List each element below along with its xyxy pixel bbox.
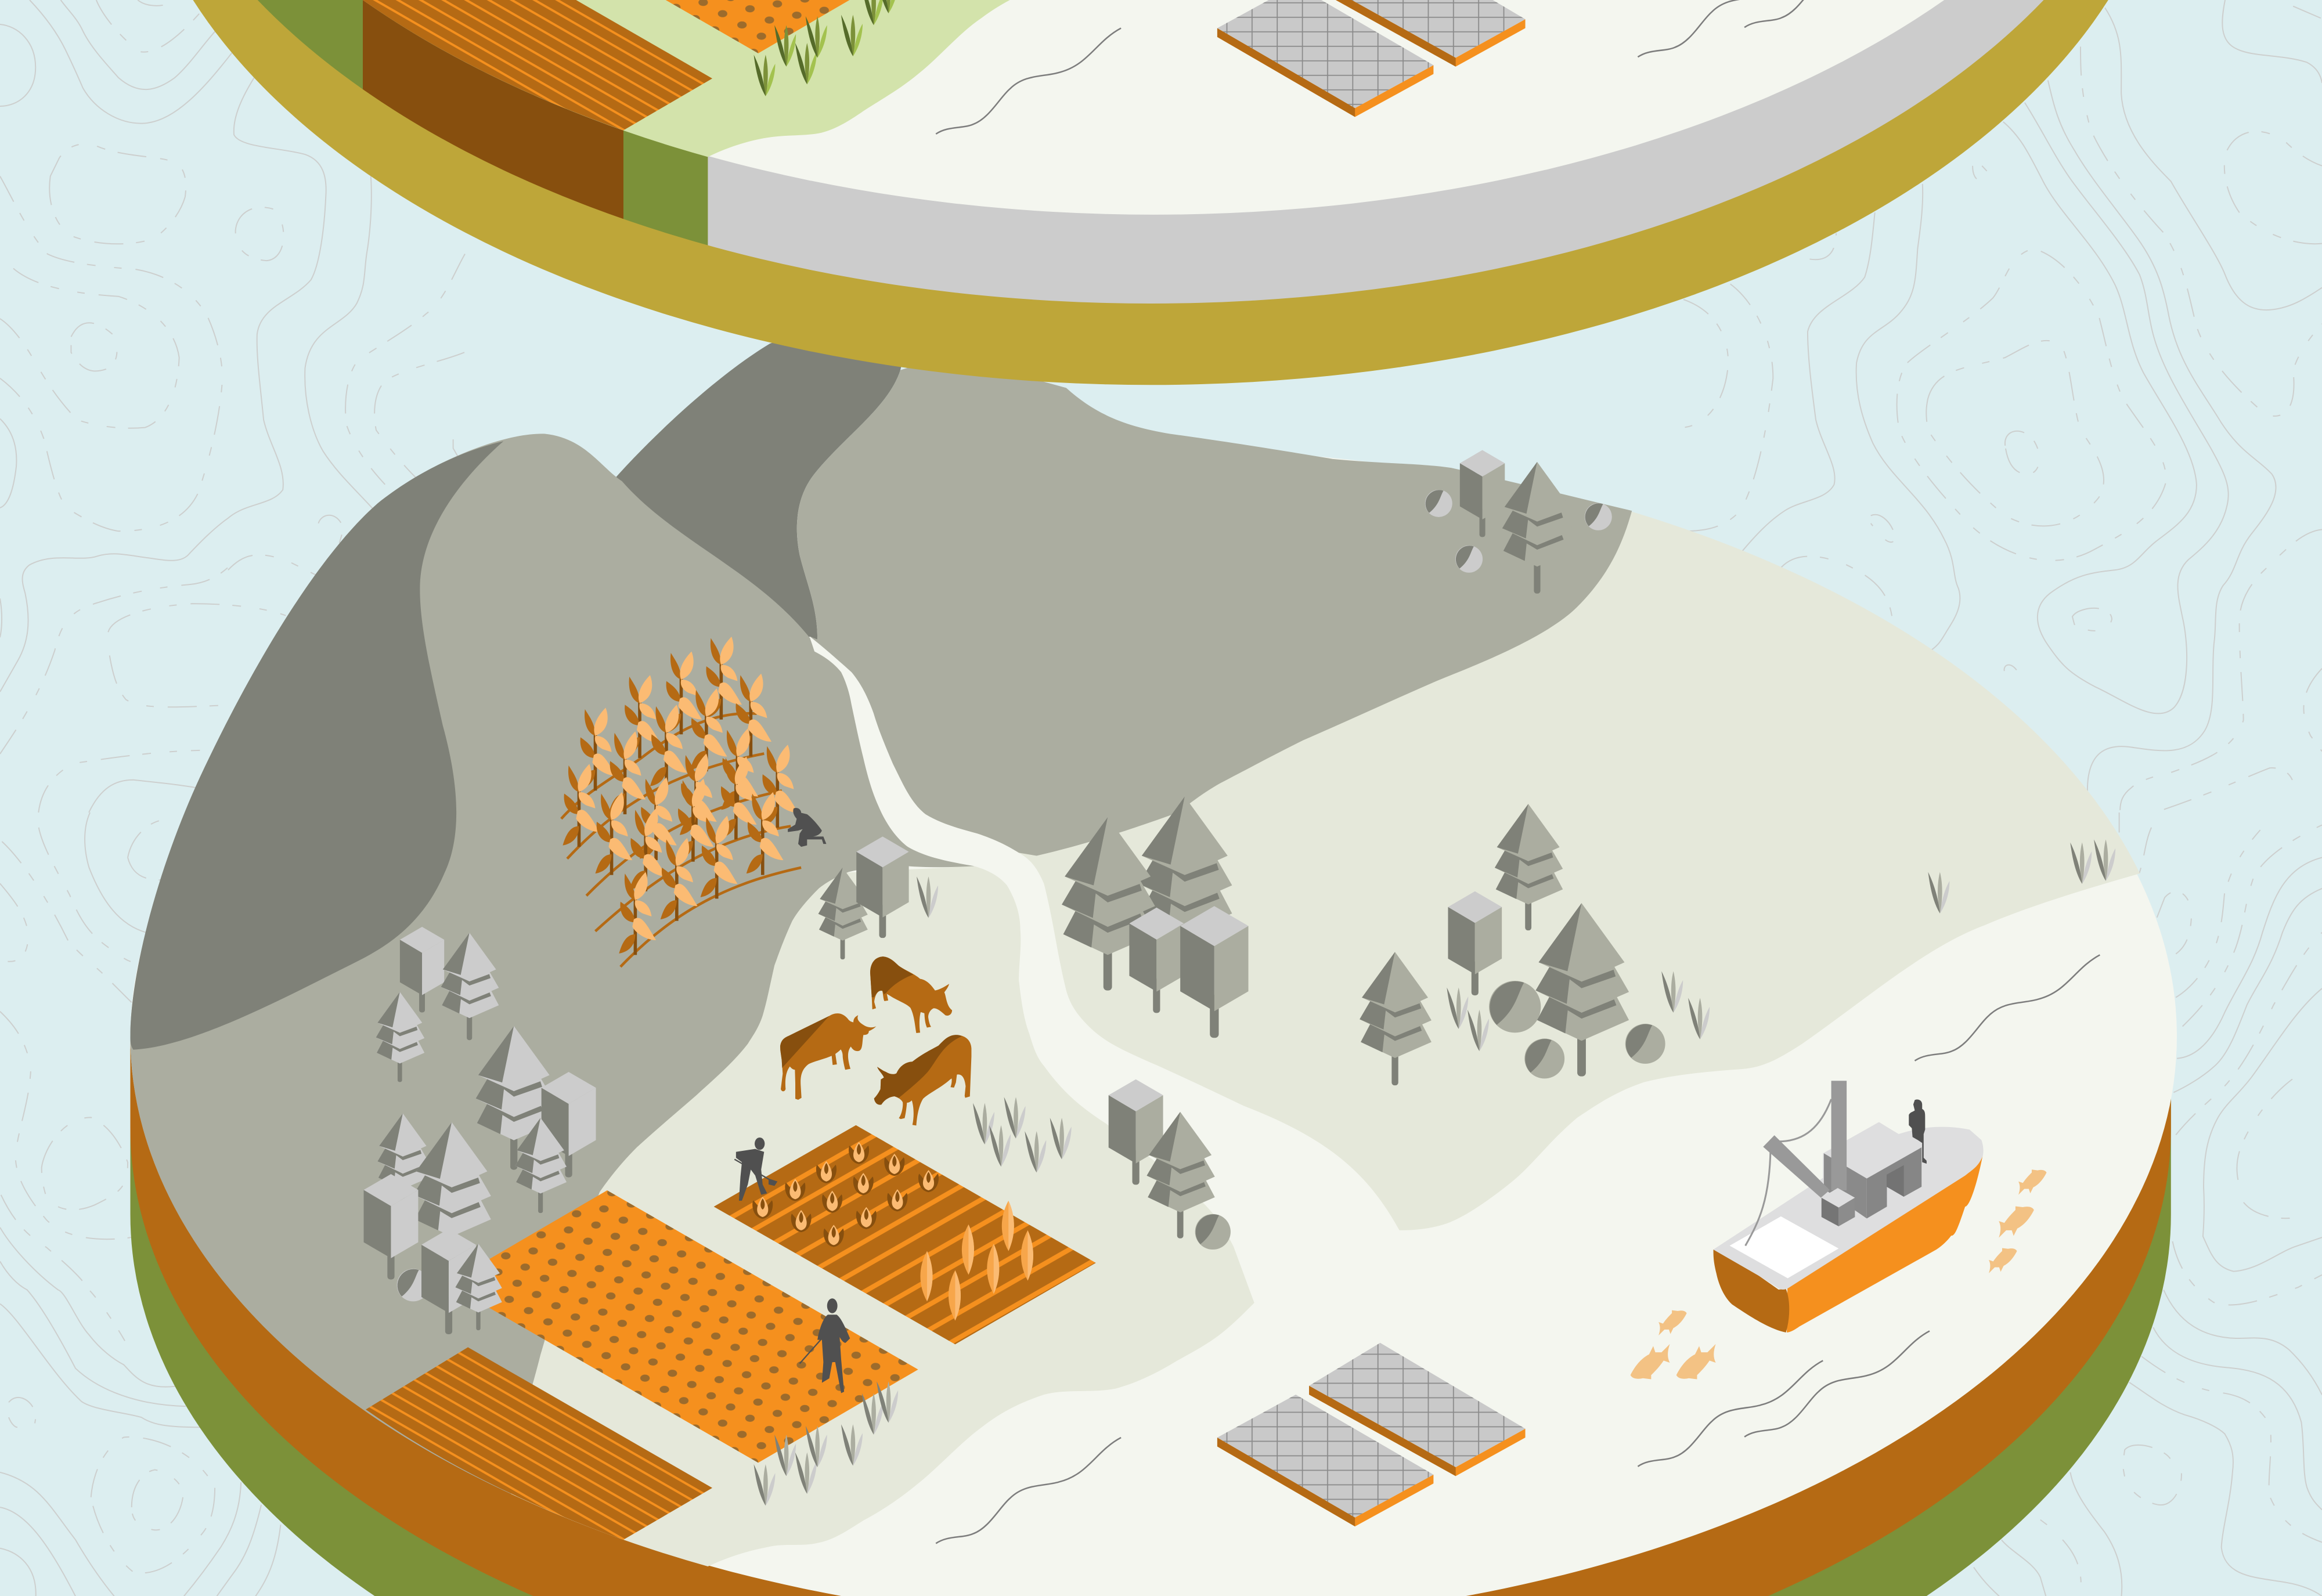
upper disc: green land — [363, 0, 1044, 157]
upper disc: gold base layer — [130, 0, 2171, 385]
contour lines: lower right — [1974, 813, 2322, 1596]
trees on right hill — [1425, 450, 1612, 594]
upper disc: green grass tufts — [753, 0, 898, 96]
cows — [780, 956, 971, 1125]
fisherman — [1909, 1099, 1927, 1164]
upper disc: solar panels — [1217, 0, 1526, 117]
boom — [1763, 1135, 1830, 1198]
lower disc: green base layer — [130, 1037, 2171, 1596]
cow right — [874, 1035, 971, 1125]
trees on lowland — [819, 796, 1665, 1250]
fishing boat — [1714, 1081, 1984, 1333]
dotted orange field — [447, 1190, 918, 1463]
deck — [1714, 1122, 1984, 1290]
fish — [1631, 1169, 2047, 1380]
trees on left hill — [364, 927, 596, 1334]
grass tufts — [753, 839, 2115, 1505]
left hill shadow — [130, 441, 503, 1050]
cabin — [1824, 1122, 1921, 1218]
lower disc: brown soil layer — [130, 1037, 2171, 1596]
striped field at disc rim — [366, 1347, 712, 1540]
upper disc: striped field — [360, 0, 712, 130]
deck box — [1822, 1188, 1855, 1226]
contour lines: upper right — [1683, 0, 2322, 813]
maize plants on hillside — [563, 637, 798, 955]
mast — [1831, 1081, 1847, 1190]
hull side — [1787, 1155, 1983, 1333]
back hill — [797, 355, 1632, 855]
rigging ropes — [1746, 1099, 1831, 1245]
left lowland — [511, 866, 1254, 1566]
cow top — [870, 956, 952, 1033]
upper disc: waves — [936, 0, 1930, 134]
lower disc: pale water surface — [130, 449, 2177, 1596]
waves — [936, 955, 2100, 1543]
left hill — [130, 434, 975, 1494]
farmer with shovel — [734, 1138, 777, 1201]
upper disc — [193, 0, 2108, 385]
seedlings — [752, 1142, 939, 1247]
hull stern — [1714, 1250, 1789, 1333]
contour lines: lower left — [0, 813, 280, 1596]
right lowland — [1019, 511, 2140, 1230]
tall leaves — [920, 1201, 1033, 1321]
upper disc: dotted field — [666, 0, 850, 53]
solar panels — [1217, 1343, 1526, 1526]
lower disc — [130, 296, 2177, 1596]
crouching farmer — [788, 808, 826, 847]
shrubs — [1425, 490, 1612, 573]
back ridge, dark — [592, 296, 918, 651]
furrowed field with seedlings — [714, 1125, 1096, 1344]
cow left — [780, 1013, 876, 1100]
deck hatch — [1730, 1216, 1838, 1279]
upper disc: cut side band — [258, 0, 2043, 304]
farmer with hoe — [800, 1298, 850, 1393]
upper disc: surface — [130, 0, 2177, 215]
terraced crop rows — [561, 713, 801, 967]
contour lines: upper left — [0, 0, 465, 813]
